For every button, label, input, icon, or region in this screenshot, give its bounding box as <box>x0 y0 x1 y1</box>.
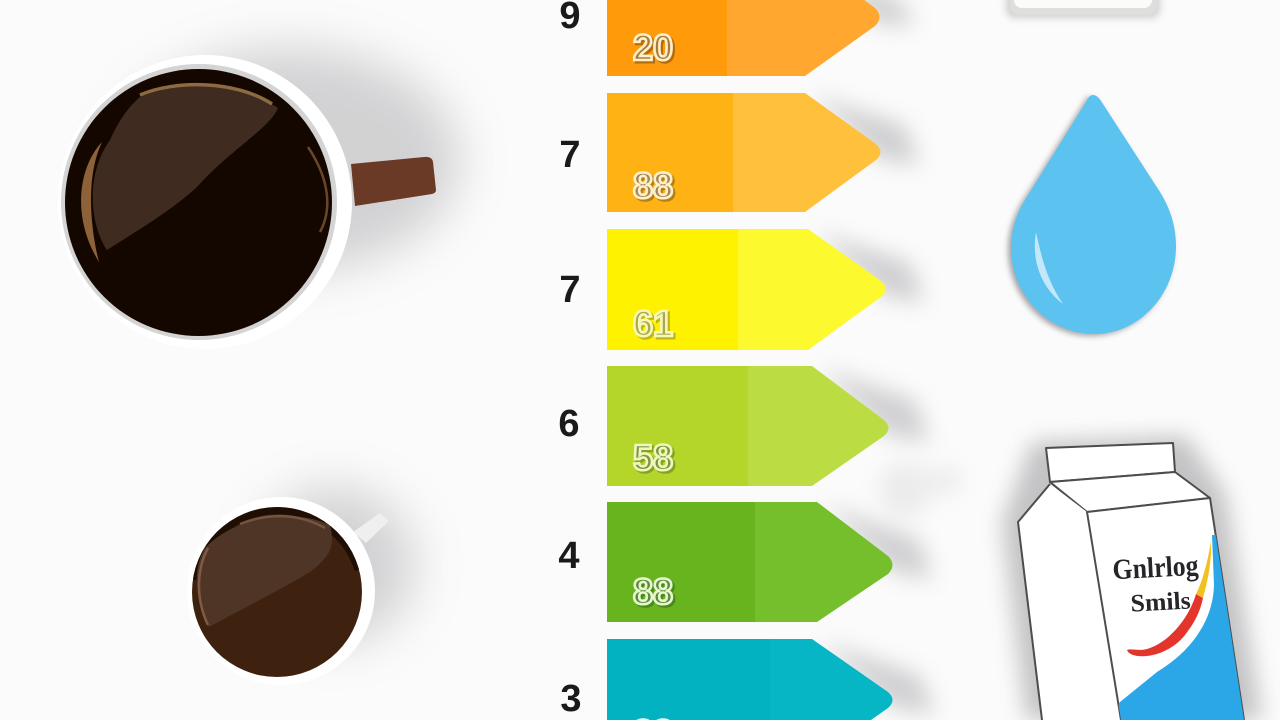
scale row: 4 / 88 <box>558 502 892 622</box>
carton side panel <box>1018 484 1121 720</box>
arrow value: 88 <box>635 573 675 614</box>
row number: 3 <box>560 678 582 720</box>
arrow value: 88 <box>633 165 673 206</box>
row number: 7 <box>559 134 581 176</box>
carton roof <box>1050 472 1210 512</box>
arrow value: 20 <box>633 27 673 68</box>
yellow arrow <box>607 229 886 350</box>
carton label: Smils <box>1130 587 1192 618</box>
row number: 4 <box>558 535 580 577</box>
amber arrow <box>607 93 880 212</box>
row number: 7 <box>559 269 581 311</box>
small coffee surface <box>192 507 362 677</box>
small cup shadow <box>255 487 415 643</box>
cup handle <box>351 157 436 206</box>
arrow value: 61 <box>633 303 673 344</box>
carton label <box>1112 550 1200 618</box>
small cup rim <box>187 497 375 685</box>
cup shadow <box>120 48 460 272</box>
carton label: Gnlrlog <box>1112 550 1200 586</box>
milk carton <box>1002 436 1262 720</box>
arrow value: 88 <box>635 167 675 208</box>
drop body <box>1011 95 1176 334</box>
scale row: 3 / 88 <box>560 639 892 720</box>
water drop <box>1008 95 1176 336</box>
arrow shadows <box>812 0 935 715</box>
marble texture <box>879 462 961 518</box>
top object: carton edge <box>1006 0 1160 18</box>
drop highlight <box>1035 232 1063 304</box>
small coffee cup <box>187 487 415 685</box>
row number: 6 <box>558 403 580 445</box>
carton shadow <box>1002 436 1262 720</box>
orange arrow <box>607 0 880 76</box>
carton blue panel <box>1118 535 1244 720</box>
lime arrow <box>607 366 888 486</box>
teal arrow <box>607 639 892 720</box>
coffee reflection <box>81 85 327 262</box>
green arrow <box>607 502 892 622</box>
large coffee cup <box>58 48 460 349</box>
cup rim <box>58 55 352 349</box>
small cup handle <box>353 513 389 543</box>
scale row: 9 / 20 <box>559 0 880 76</box>
arrow value: 88 <box>633 571 673 612</box>
coffee surface <box>65 69 332 336</box>
carton front panel <box>1087 498 1244 720</box>
drop shadow <box>1008 97 1173 336</box>
scale row: 7 / 61 <box>559 229 886 350</box>
arrow value: 20 <box>635 29 675 70</box>
arrow value: 58 <box>633 437 673 478</box>
arrow value: 58 <box>635 439 675 480</box>
arrow value: 61 <box>635 305 675 346</box>
scale row: 7 / 88 <box>559 93 880 212</box>
carton cap <box>1046 443 1175 482</box>
scale row: 6 / 58 <box>558 366 888 486</box>
